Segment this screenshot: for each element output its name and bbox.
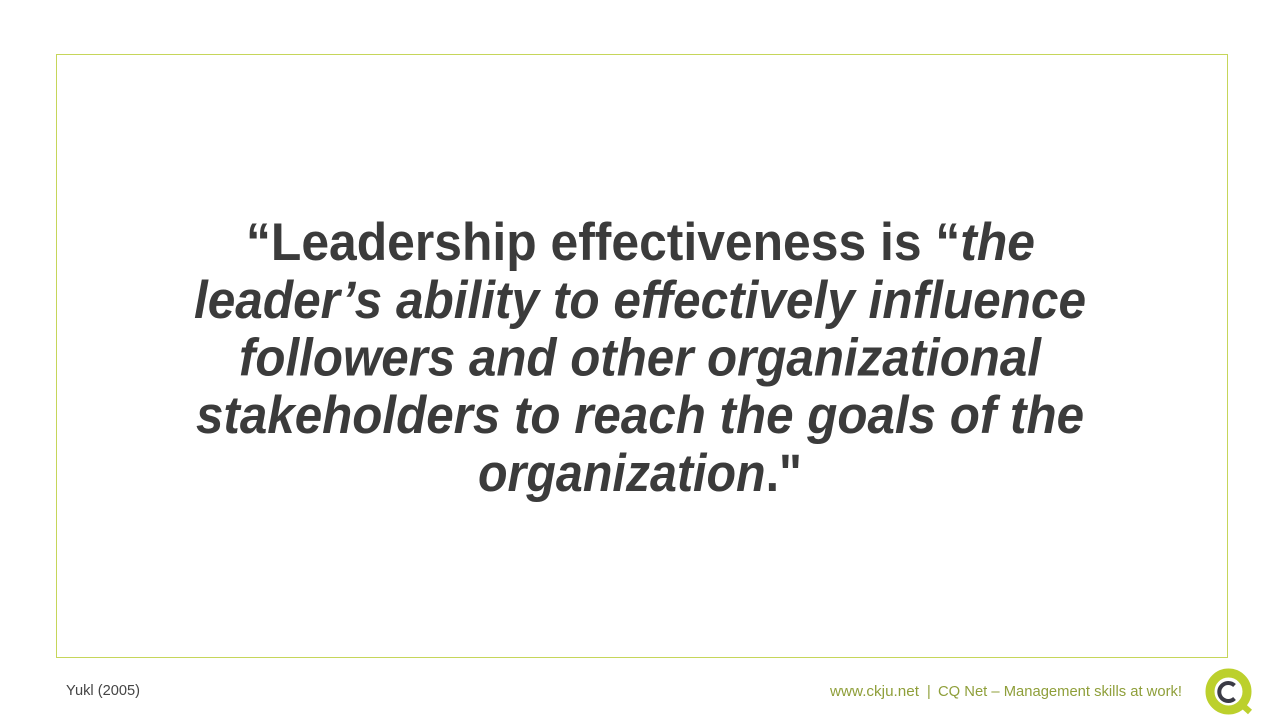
footer tagline: www.ckju.net <box>829 684 919 700</box>
quote text: organization." <box>478 444 802 503</box>
quote text <box>194 213 1086 503</box>
footer tagline <box>829 684 1182 700</box>
source citation: Yukl (2005) <box>66 683 140 699</box>
quote text: leader’s ability to effectively influence <box>194 271 1086 330</box>
quote text: followers and other organizational <box>239 328 1042 388</box>
panel: quote frame <box>56 54 1228 658</box>
quote text: “Leadership effectiveness is “the <box>246 213 1035 272</box>
footer tagline: CQ Net – Management skills at work! <box>938 684 1182 700</box>
icon: CQ logo <box>1210 673 1250 712</box>
quote text: stakeholders to reach the goals of the <box>196 386 1084 445</box>
footer tagline: | <box>927 684 931 700</box>
